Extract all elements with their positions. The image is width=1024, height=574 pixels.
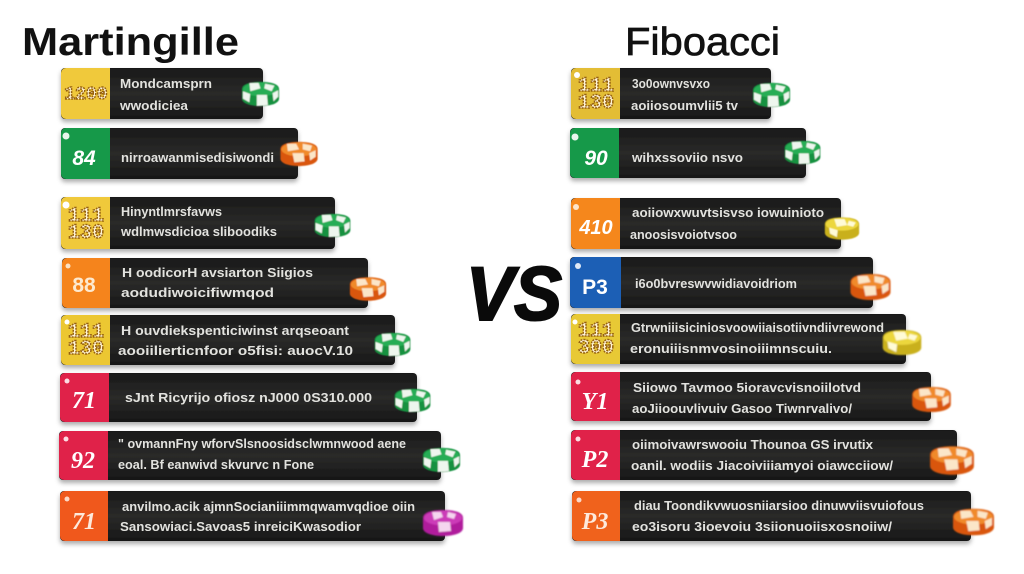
row L3: wdlmwsdicioa sliboodiks: [120, 224, 277, 239]
title: Fiboacci: Fiboacci: [625, 21, 780, 64]
row R4: [570, 257, 890, 308]
row L1: 1200: [64, 85, 108, 105]
row R6: Y1: [582, 389, 608, 415]
row R7: oiimoivawrswooiu Thounoa GS irvutix: [632, 437, 874, 452]
row R3: 410: [578, 217, 613, 239]
row L8: Sansowiaci.Savoas5 inreiciKwasodior: [120, 519, 361, 534]
row R8: eo3isoru 3ioevoiu 3siionuoiisxosnoiiw/: [632, 519, 892, 534]
row L1: [61, 68, 279, 119]
row R2: wihxssoviio nsvo: [631, 150, 743, 165]
row R7: oanil. wodiis Jiacoiviiiamyoi oiawcciiow/: [631, 458, 893, 473]
row L7: eoal. Bf eanwivd skvurvc n Fone: [118, 457, 314, 472]
row R1: [571, 68, 790, 119]
row R1: 111: [578, 75, 614, 98]
row R5: [571, 314, 921, 364]
row R6: Siiowo Tavmoo 5ioravcvisnoiilotvd: [633, 380, 861, 395]
row R7: P2: [581, 447, 608, 473]
row L3: [61, 197, 350, 249]
row R8: P3: [581, 509, 608, 535]
row L2: 84: [72, 147, 96, 170]
row R1: 130: [578, 92, 614, 115]
panel: Fiboacci rows: [570, 68, 994, 541]
row R7: [571, 430, 974, 480]
row L1: Mondcamsprn: [120, 76, 212, 91]
row L4: aodudiwoicifiwmqod: [121, 285, 274, 300]
panel: Martingille rows: [59, 68, 463, 541]
title: Martingille: Martingille: [22, 21, 239, 64]
row L7: [59, 431, 460, 480]
row L4: 88: [72, 274, 96, 297]
row L7: " ovmannFny wforvSlsnoosidsclwmnwood aene: [118, 436, 406, 451]
row R1: aoiiosoumvlii5 tv: [631, 98, 739, 113]
row L3: 111: [68, 205, 104, 228]
row L8: anvilmo.acik ajmnSocianiiimmqwamvqdioe oiin: [122, 499, 415, 514]
row R2: 90: [584, 147, 608, 170]
row R3: [571, 198, 859, 249]
row R5: 111: [578, 320, 614, 343]
row R3: anoosisvoiotvsoo: [630, 227, 737, 242]
row L1: wwodiciea: [119, 98, 189, 113]
row L6: [60, 373, 430, 422]
row L5: [61, 315, 410, 365]
row L5: H ouvdiekspenticiwinst arqseoant: [121, 323, 350, 338]
row R4: P3: [582, 276, 608, 299]
VS label: VS: [466, 252, 562, 337]
row R8: [572, 491, 994, 541]
row L2: nirroawanmisedisiwondi: [121, 150, 274, 165]
row R1: 3o0ownvsvxo: [632, 76, 710, 91]
row R6: [571, 372, 951, 421]
row R5: eronuiiisnmvosinoiiimnscuiu.: [630, 341, 832, 356]
row L4: [62, 258, 386, 308]
row R4: i6o0bvreswvwidiavoidriom: [635, 276, 797, 291]
row L5: 111: [68, 321, 104, 344]
row L5: 130: [68, 338, 104, 361]
row R8: diau Toondikvwuosniiarsioo dinuwviisvuiofous: [634, 498, 924, 513]
row R6: aoJiioouvlivuiv Gasoo Tiwnrvalivo/: [632, 401, 852, 416]
row R5: 300: [578, 337, 614, 360]
row L3: Hinyntlmrsfavws: [121, 204, 222, 219]
row L8: [60, 491, 463, 541]
row L5: aooiilierticnfoor o5fisi: auocV.10: [118, 343, 353, 358]
row L6: sJnt Ricyrijo ofiosz nJ000 0S310.000: [125, 390, 372, 405]
row L7: 92: [71, 448, 95, 474]
row R5: Gtrwniiisiciniosvoowiiaisotiivndiivrewond: [631, 320, 884, 335]
row L3: 130: [68, 222, 104, 245]
row L6: 71: [72, 388, 96, 414]
row L8: 71: [72, 509, 96, 535]
row R2: [570, 128, 820, 178]
row L2: [61, 128, 318, 179]
row L4: H oodicorH avsiarton Siigios: [122, 265, 313, 280]
row R3: aoiiowxwuvtsisvso iowuinioto: [632, 205, 824, 220]
